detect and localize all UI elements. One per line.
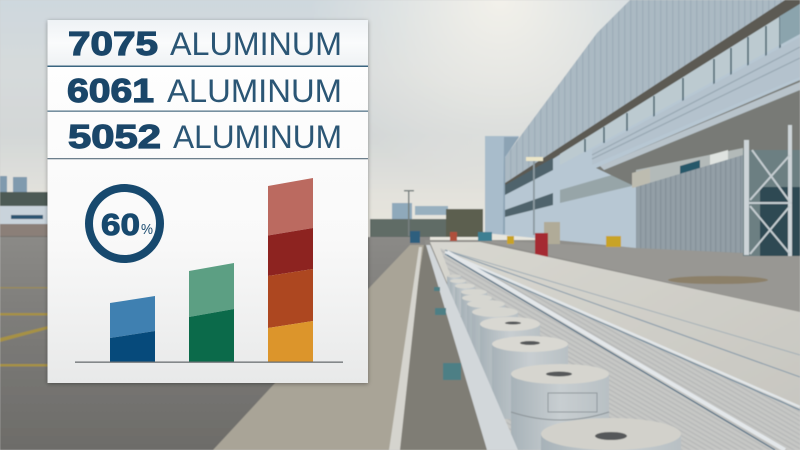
row: 7075 aluminum: ALUMINUM [170,26,342,62]
lamp post [526,157,543,235]
row: 5052 aluminum: 5052 [68,118,161,155]
aluminum platform [430,242,800,450]
badge: 60 percent ring: % [141,221,153,238]
row: 5052 aluminum [68,118,342,155]
tower [485,136,519,235]
dark strip beside rail [392,245,487,450]
ribbed decking [440,248,800,450]
row: 7075 aluminum: 7075 [68,25,158,62]
row: 6061 aluminum [67,72,342,109]
bar: blue [110,296,155,362]
corrugated wall [636,155,743,253]
panel background [48,20,368,383]
row: 5052 aluminum: ALUMINUM [173,119,342,155]
teal rail brackets [434,287,461,380]
row: 6061 aluminum: ALUMINUM [167,73,342,109]
badge: 60 percent ring [89,188,160,259]
white curb line [389,247,422,450]
bar chart [75,178,343,363]
distant skyline [0,176,483,248]
canopy [592,37,800,165]
building upper cladding [505,0,785,183]
concrete cylinders row [447,274,681,450]
bar: green [189,263,234,362]
ground right yard [425,240,800,450]
yellow parking marks [0,287,48,366]
platform rails [445,250,800,450]
ground asphalt left [0,237,430,450]
concrete sidewalk [213,245,424,450]
row: 6061 aluminum: 6061 [67,72,154,109]
building dark eave band [505,0,800,189]
sky [0,0,800,245]
panel: aluminum grades and chart [48,20,368,383]
yard objects [410,222,621,258]
bar: red to amber [268,178,313,362]
lower window strips [505,168,636,217]
white rail gutter [426,245,518,450]
steel frame and dark glass [743,125,800,256]
upper window strip [505,4,800,195]
chart baseline [75,362,343,363]
canopy underside truss [596,80,800,188]
row: 7075 aluminum [48,20,368,66]
building lower wall [505,5,800,248]
badge: 60 percent ring: 60 [101,207,140,242]
